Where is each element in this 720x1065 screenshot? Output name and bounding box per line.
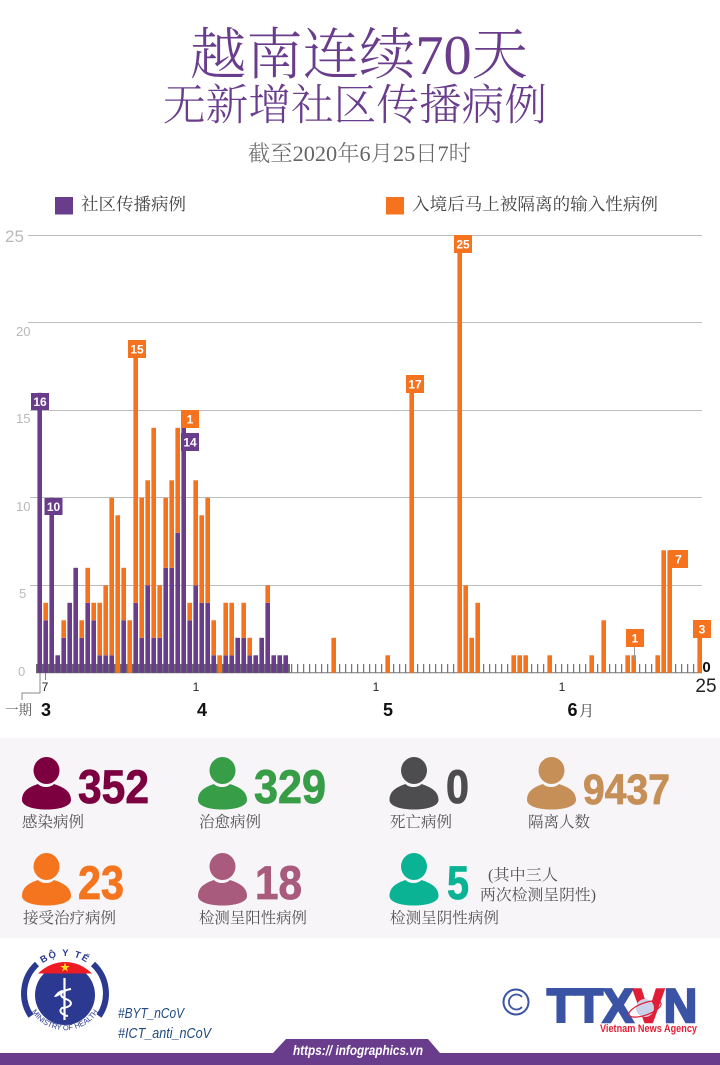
value flag: 14 <box>181 433 199 451</box>
logo: Ministry of Health: MINISTRY OF HEALTH <box>32 1009 98 1030</box>
x axis labels: 25 <box>695 676 717 697</box>
stat: tested negative 5: 两次检测呈阴性) <box>480 886 596 904</box>
legend swatch: community transmission <box>55 197 73 214</box>
stat: under treatment 23 <box>22 853 124 927</box>
value flag: 16 <box>31 393 49 410</box>
stat: quarantined 9437: 9437 <box>583 766 670 814</box>
stat: recovered 329: 329 <box>254 760 326 813</box>
stat: infected 352: 感染病例 <box>22 813 84 831</box>
logo: TTXVN: TTXVN <box>547 979 697 1032</box>
value flag: 16: 16 <box>33 395 47 409</box>
value flag: 1 June <box>626 629 644 660</box>
stat: recovered 329: 治愈病例 <box>199 813 261 831</box>
value flag: 17 <box>406 375 424 393</box>
value flag: 3 <box>693 620 711 638</box>
bar chart: daily cases <box>5 227 717 720</box>
value flag: 7 <box>669 550 688 568</box>
logo: TTXVN: Vietnam News Agency <box>600 1023 698 1035</box>
x axis labels: 5 <box>383 700 393 720</box>
panel: statistics <box>0 738 720 938</box>
stat: tested negative 5 <box>390 853 596 927</box>
hashtags <box>118 1005 213 1042</box>
stat: tested positive 18: 18 <box>255 856 302 909</box>
stat: quarantined 9437: 隔离人数 <box>528 813 590 831</box>
hashtags: #BYT_nCoV <box>118 1005 186 1022</box>
logo: Ministry of Health: BỘ Y TẾ <box>40 949 90 963</box>
legend swatch: imported cases <box>386 197 404 214</box>
title <box>163 25 547 166</box>
y axis labels: 0 <box>18 664 25 679</box>
stat: deaths 0: 0 <box>446 760 469 813</box>
value flag: 1 imported April <box>181 410 199 428</box>
stat: infected 352: 352 <box>78 760 149 813</box>
stat: tested negative 5: 5 <box>447 856 469 909</box>
value flag: 1 June: 1 <box>632 632 639 646</box>
value flag: 25 <box>454 235 472 253</box>
logo: Ministry of Health <box>21 949 109 1030</box>
legend label: imported cases: 入境后马上被隔离的输入性病例 <box>412 195 658 214</box>
value flag: 14: 14 <box>183 436 197 450</box>
stat: tested negative 5: 检测呈阴性病例 <box>390 909 499 927</box>
x axis labels: 3 <box>41 700 51 720</box>
value flag: 17: 17 <box>408 378 422 392</box>
footer url: https:// infographics.vn <box>293 1042 423 1058</box>
y axis labels <box>5 227 30 679</box>
title line 1: 越南连续70天 <box>190 25 528 87</box>
value flag: 3: 3 <box>699 622 706 636</box>
value flag: 10: 10 <box>47 500 60 514</box>
value flag: 10 <box>44 498 62 515</box>
imported case bars May to June <box>331 235 702 673</box>
stat: tested negative 5: (其中三人 <box>488 866 558 884</box>
end value: 0: 0 <box>702 659 711 676</box>
stacked bars March to April <box>37 340 288 673</box>
x axis ticks <box>36 668 704 673</box>
value flag: 25: 25 <box>456 238 470 252</box>
value flag: 1 imported April: 1 <box>187 412 194 426</box>
value flag: 15: 15 <box>130 342 144 356</box>
value flag: 15 <box>128 340 146 358</box>
y axis labels: 5 <box>19 586 26 601</box>
x axis labels: 4 <box>197 700 207 720</box>
hashtags: #ICT_anti_nCoV <box>118 1025 213 1042</box>
footer bar <box>0 1039 720 1065</box>
stat: quarantined 9437 <box>527 757 670 831</box>
stat: under treatment 23: 接受治疗病例 <box>23 909 116 927</box>
legend <box>55 195 658 214</box>
subtitle date: 截至2020年6月25日7时 <box>248 141 471 166</box>
x axis labels: 7 <box>42 680 49 694</box>
y axis labels: 20 <box>16 324 30 339</box>
stat: deaths 0 <box>390 757 469 831</box>
stat: under treatment 23: 23 <box>78 856 124 909</box>
stat: tested positive 18 <box>198 853 307 927</box>
stat: infected 352 <box>22 757 149 831</box>
x axis labels: 6 <box>567 700 578 720</box>
value flag: 7: 7 <box>675 552 682 566</box>
stat: deaths 0: 死亡病例 <box>390 813 452 831</box>
y axis labels: 15 <box>16 411 30 426</box>
icon: copyright <box>504 990 528 1014</box>
logo: Ministry of Health: ★ <box>60 963 70 974</box>
x axis labels <box>5 673 717 720</box>
baseline shaded band <box>36 664 290 673</box>
x axis labels: 月 <box>579 703 594 720</box>
x axis labels: 1 <box>193 680 200 694</box>
stat: recovered 329 <box>198 757 326 831</box>
legend label: community transmission: 社区传播病例 <box>81 195 186 214</box>
y axis labels: 25 <box>5 227 24 246</box>
x axis labels: 一期 <box>5 703 32 719</box>
y axis grid lines <box>28 236 702 586</box>
title line 2: 无新增社区传播病例 <box>163 83 547 130</box>
y axis labels: 10 <box>16 499 30 514</box>
stat: tested positive 18: 检测呈阳性病例 <box>199 909 307 927</box>
x axis labels: 1 <box>559 680 566 694</box>
x axis labels: 1 <box>373 680 380 694</box>
